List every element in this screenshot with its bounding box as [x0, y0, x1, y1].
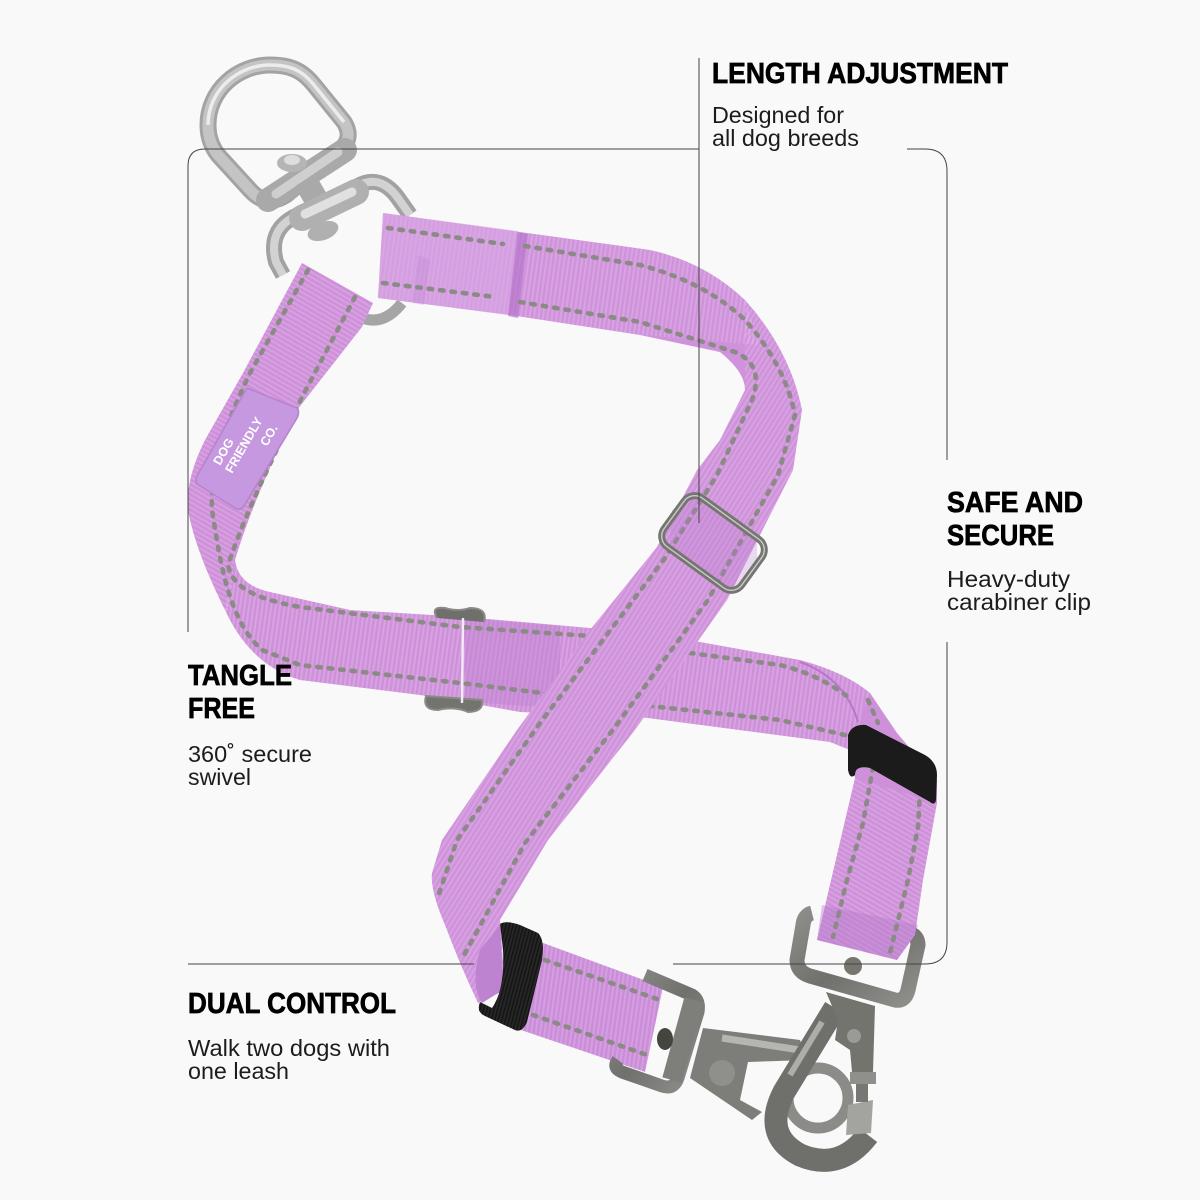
- brand text: DOG: [210, 436, 237, 468]
- heading: SECURE: [947, 520, 1054, 552]
- swivel ring top: [208, 65, 348, 212]
- text block: dual control: [188, 988, 396, 1084]
- description: Heavy-duty: [947, 566, 1071, 592]
- heading: DUAL CONTROL: [188, 988, 396, 1020]
- description: 360˚ secure: [188, 741, 312, 767]
- strap: end tab with lower clip: [515, 940, 663, 1072]
- carabiner clip: [616, 957, 876, 1160]
- brand text: FRIENDLY: [222, 414, 266, 476]
- brand text: CO.: [257, 422, 281, 448]
- heading: SAFE AND: [947, 487, 1083, 519]
- description: Designed for: [712, 102, 844, 128]
- description: swivel: [188, 764, 251, 790]
- leash illustration: [188, 65, 937, 1160]
- callout line: dual control: [188, 963, 474, 965]
- strap: main diagonal with top fold: [378, 213, 802, 1003]
- brand patch: [196, 388, 298, 509]
- brand text: [210, 414, 281, 476]
- swivel ring lower: [274, 182, 410, 320]
- callout line: length adjustment to tangle free: [188, 58, 699, 632]
- callout line: length adjustment to safe and secure: [907, 149, 947, 460]
- text block: length adjustment: [712, 58, 1008, 151]
- strap: back loop: [188, 263, 937, 960]
- adjustment slider: [657, 491, 769, 595]
- slider back: [425, 608, 485, 712]
- description: all dog breeds: [712, 125, 859, 151]
- callout line: safe and secure to dual control: [673, 642, 947, 964]
- description: carabiner clip: [947, 589, 1091, 615]
- description: Walk two dogs with: [188, 1035, 390, 1061]
- black keeper bands: [479, 725, 937, 1031]
- description: one leash: [188, 1058, 289, 1084]
- carabiner ring right: [797, 913, 918, 1000]
- heading: TANGLE: [188, 660, 292, 692]
- heading: FREE: [188, 693, 255, 725]
- heading: LENGTH ADJUSTMENT: [712, 58, 1008, 90]
- text block: safe and secure: [947, 487, 1091, 615]
- text block: tangle free: [188, 660, 312, 790]
